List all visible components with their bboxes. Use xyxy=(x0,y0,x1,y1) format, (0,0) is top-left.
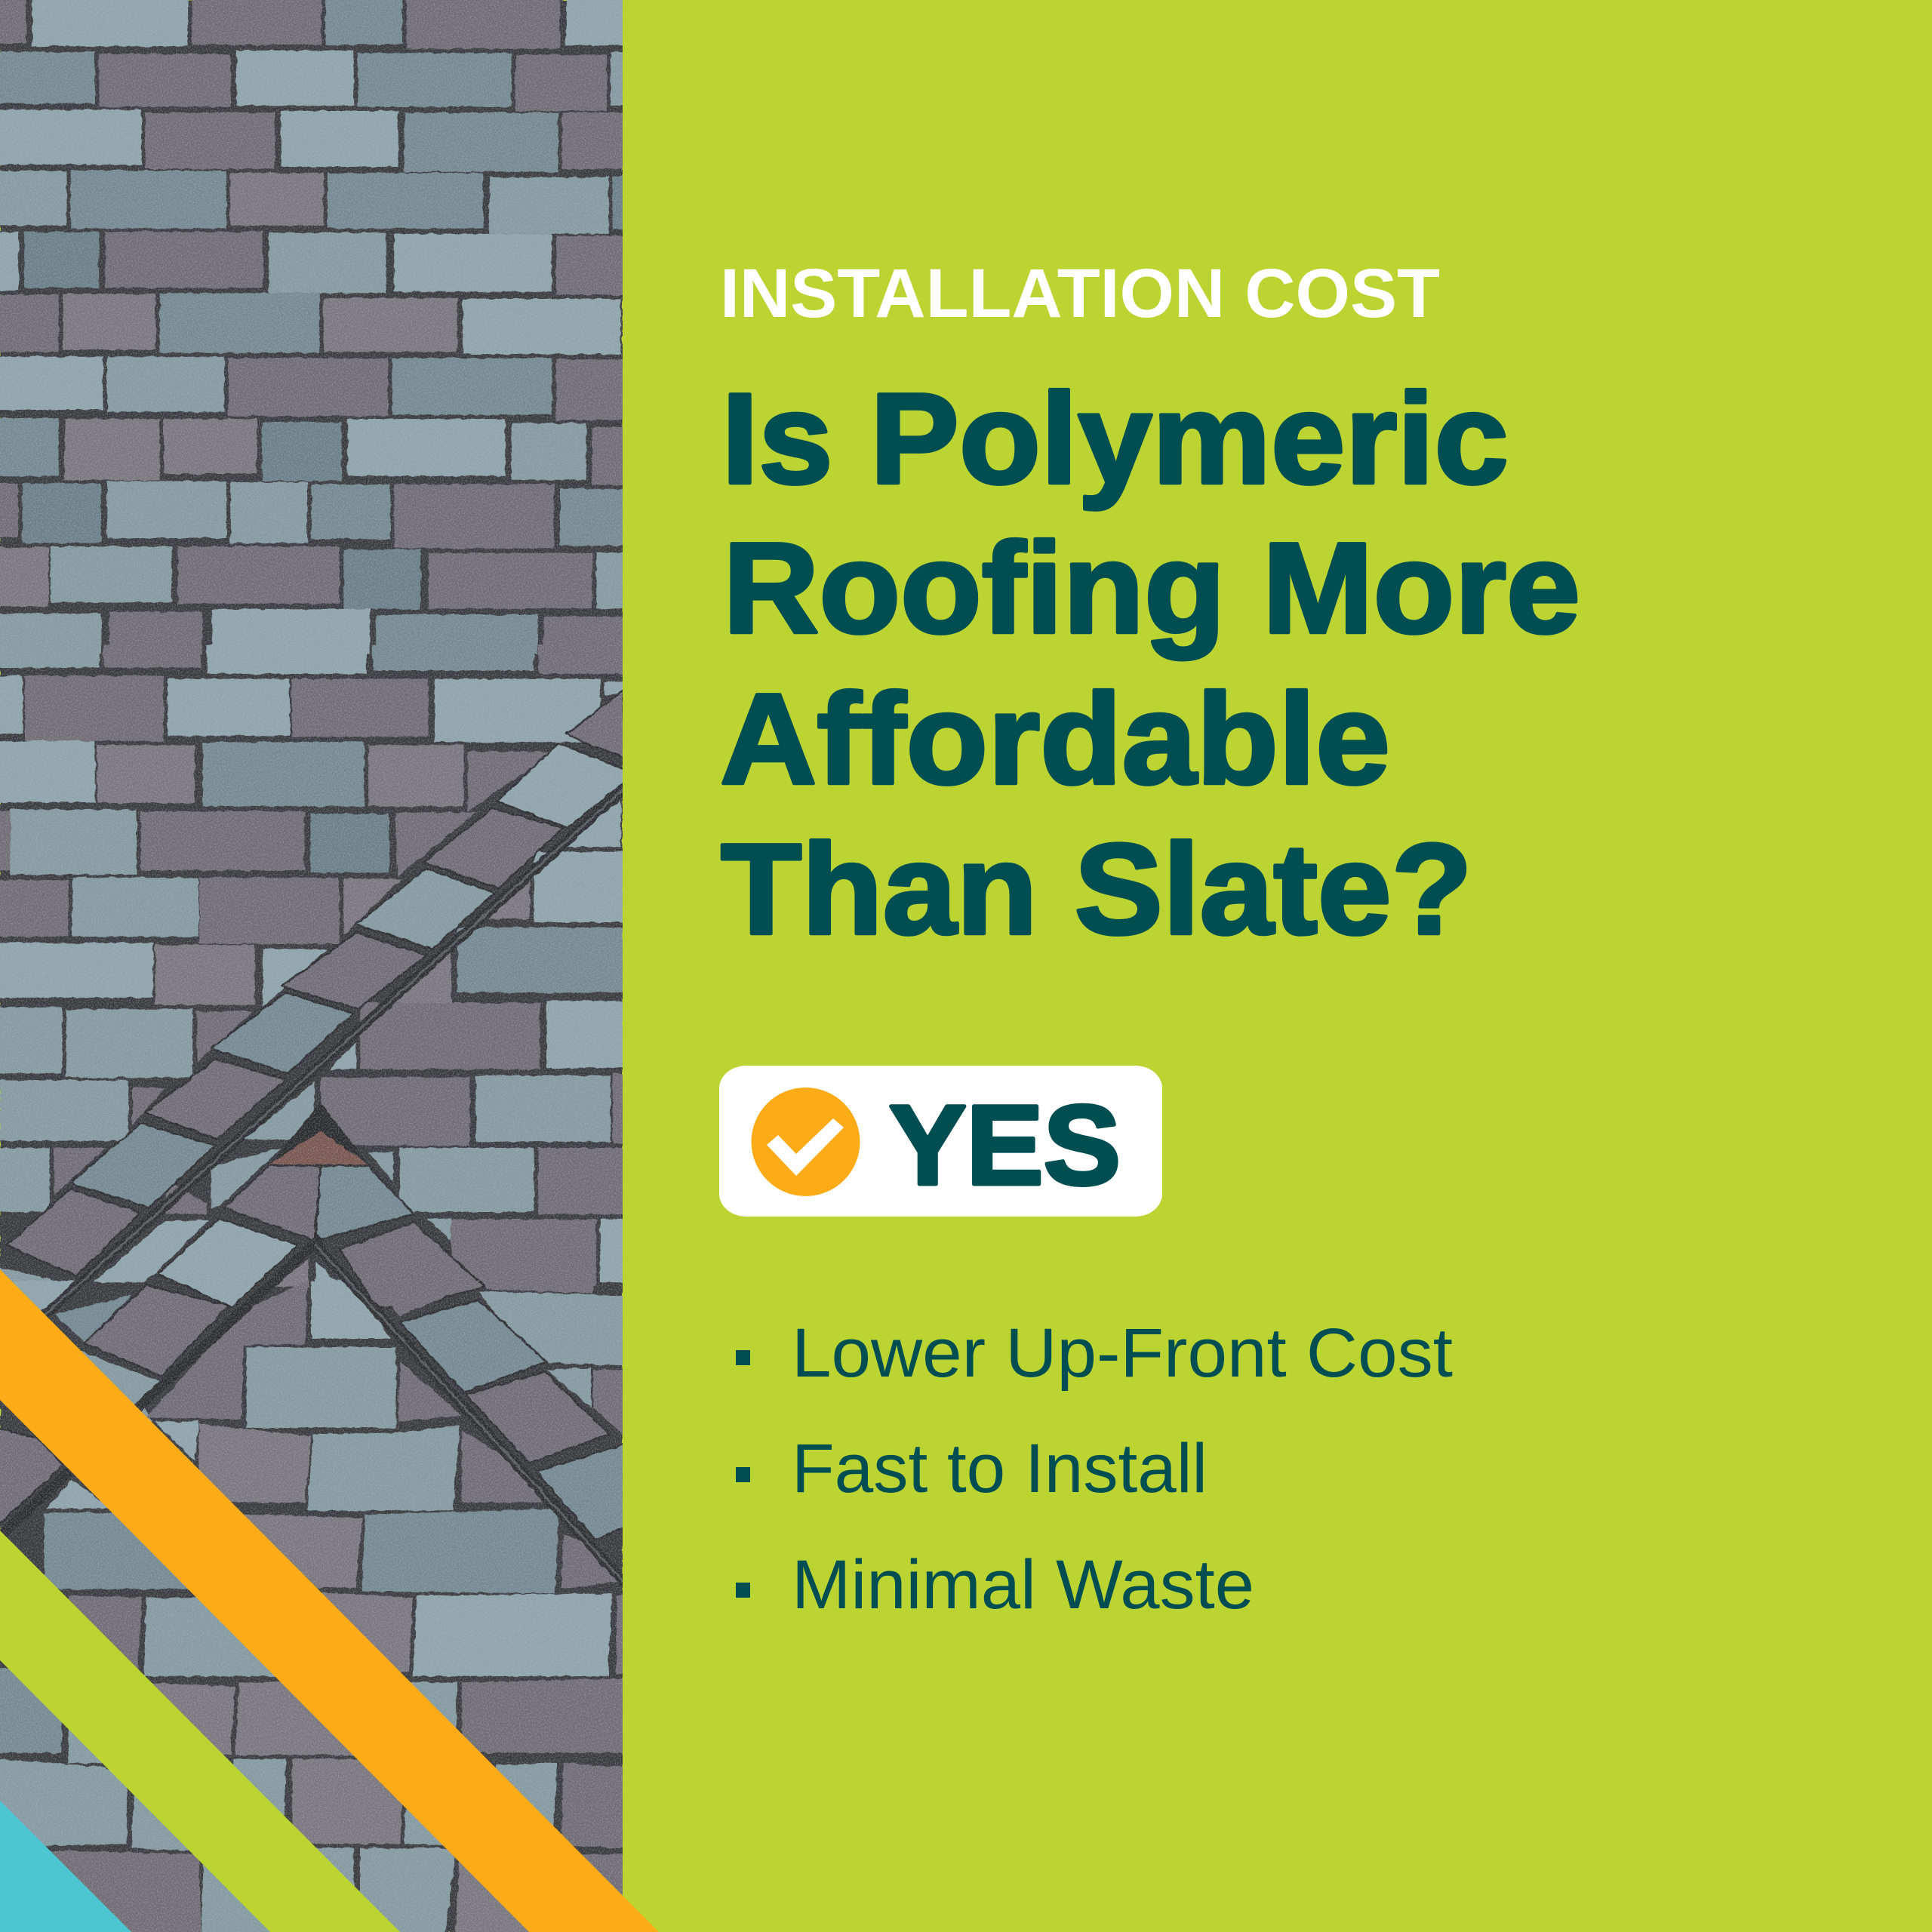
blue corner xyxy=(0,1801,131,1932)
title: Affordable xyxy=(720,667,1390,811)
title: Than Slate? xyxy=(721,817,1472,961)
bullet: lower up-front cost: Lower Up-Front Cost xyxy=(792,1315,1453,1392)
icon: orange check circle xyxy=(752,1088,860,1196)
roof ridge rods xyxy=(0,786,626,1585)
badge label: YES xyxy=(889,1081,1121,1208)
title: Is Polymeric xyxy=(721,367,1509,511)
title xyxy=(720,367,1580,961)
badge background xyxy=(719,1066,1162,1217)
bullet: fast to install: Fast to Install xyxy=(792,1430,1208,1507)
diagonal stripes xyxy=(0,1269,659,1932)
bullet list xyxy=(736,1315,1453,1623)
eyebrow: installation cost: INSTALLATION COST xyxy=(720,255,1440,332)
green stripe xyxy=(0,1531,400,1932)
title: Roofing More xyxy=(723,516,1580,660)
bullet: minimal waste: Minimal Waste xyxy=(792,1546,1254,1623)
badge: yes xyxy=(719,1066,1162,1217)
orange stripe xyxy=(0,1269,659,1932)
photo: slate roof xyxy=(0,0,626,1932)
